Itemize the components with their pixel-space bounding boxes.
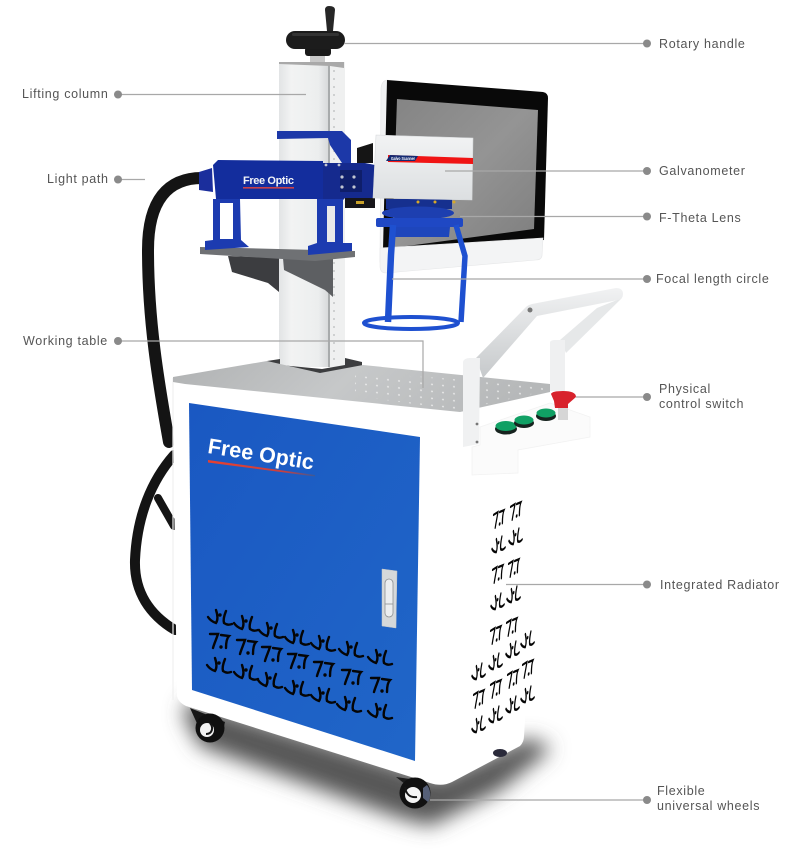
label: Working table: Working table — [23, 334, 108, 348]
scanner badge — [386, 155, 418, 161]
focal length circle cage — [364, 225, 465, 329]
label: Flexible universal wheels: universal wheels — [657, 799, 760, 813]
gray mounting plate with brackets — [200, 247, 355, 297]
label: Rotary handle: Rotary handle — [659, 37, 746, 51]
floor shadow — [183, 700, 552, 826]
label: Light path — [47, 172, 145, 186]
door vents — [207, 610, 392, 719]
handle bar — [463, 288, 623, 447]
column — [279, 62, 345, 367]
label: F-Theta Lens: F-Theta Lens — [659, 211, 741, 225]
label: Lifting column — [22, 87, 306, 101]
label: Galvanometer — [445, 164, 746, 178]
cabinet body — [173, 378, 545, 785]
control buttons — [495, 391, 576, 434]
perforated table top — [173, 361, 550, 412]
red stripe — [388, 155, 473, 164]
housing logo: Free Optic — [243, 175, 294, 187]
label: Physical control switch — [576, 382, 744, 411]
door lock — [382, 569, 397, 628]
label: Integrated Radiator — [506, 578, 780, 592]
label: Lifting column: Lifting column — [22, 87, 109, 101]
label: F-Theta Lens — [460, 211, 741, 225]
left caster wheel — [190, 708, 225, 742]
label: Physical control switch: Physical — [659, 382, 711, 396]
rotary handle wheel — [286, 6, 345, 62]
label: Galvanometer: Galvanometer — [659, 164, 746, 178]
F-Theta lens — [376, 199, 463, 237]
lifting arm — [277, 131, 373, 163]
front caster wheel — [396, 777, 430, 808]
label: Physical control switch: control switch — [659, 397, 744, 411]
side radiator vents — [472, 500, 534, 737]
column base plate — [267, 358, 362, 375]
label: Focal length circle — [392, 272, 769, 286]
side wheel back — [493, 749, 507, 757]
label: Integrated Radiator: Integrated Radiator — [660, 578, 780, 592]
blue support legs — [205, 199, 352, 255]
label: Flexible universal wheels: Flexible — [657, 784, 705, 798]
galvanometer head — [373, 135, 473, 200]
monitor — [380, 80, 548, 273]
blue door — [189, 403, 420, 761]
dark connector under housing — [345, 198, 375, 208]
door logo: Free Optic — [206, 434, 316, 475]
label: Focal length circle: Focal length circle — [656, 272, 769, 286]
label: Rotary handle — [344, 37, 746, 51]
control console — [472, 403, 590, 475]
galvanometer head: Galvo Scanner — [391, 156, 415, 161]
blue light-path housing — [199, 160, 375, 205]
fiber hose: light path — [135, 178, 202, 630]
label: Flexible universal wheels — [430, 784, 760, 813]
label: Light path: Light path — [47, 172, 109, 186]
label: Working table — [23, 334, 423, 388]
